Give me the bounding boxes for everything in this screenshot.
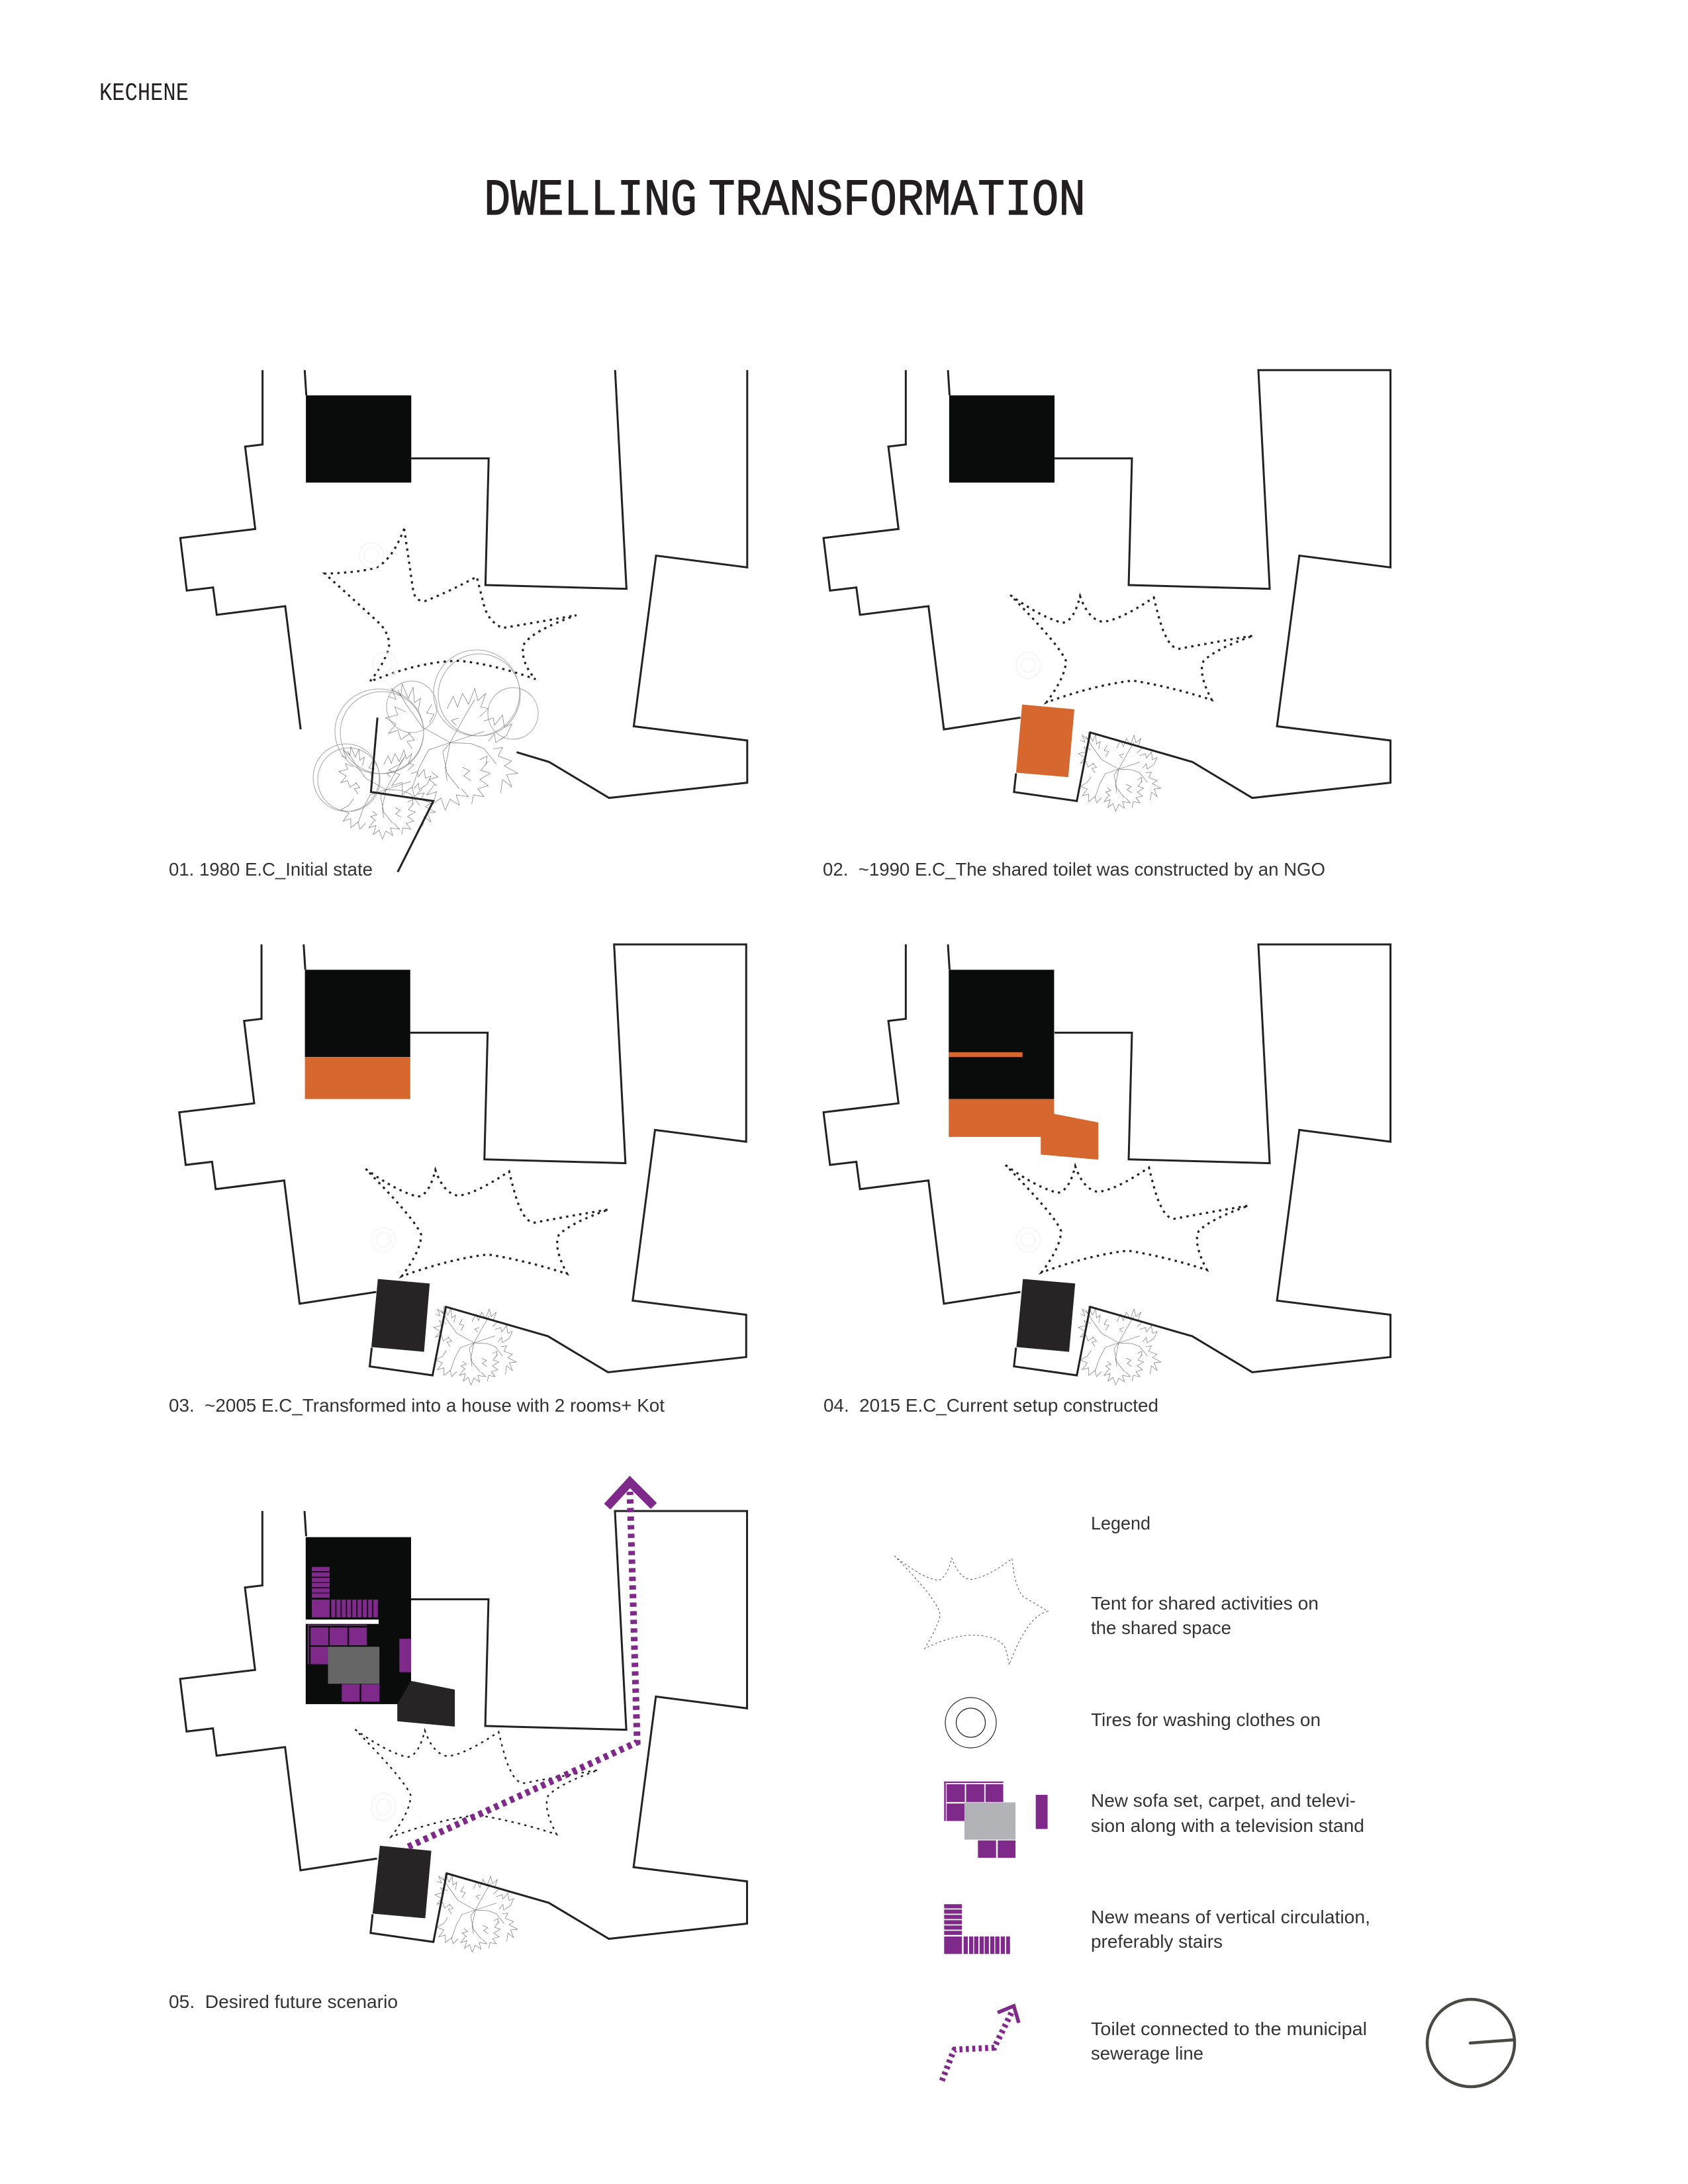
title: DWELLING <box>484 172 697 230</box>
site plan outline <box>180 370 747 872</box>
house with furniture and stairs <box>306 1537 455 1919</box>
legend icon: sewer arrow <box>942 2006 1019 2081</box>
legend heading: Legend <box>1091 1513 1150 1533</box>
legend icon: stairs <box>944 1904 1010 1954</box>
legend text: stairs: preferably stairs <box>1091 1931 1223 1952</box>
tree canopy and tree drawing <box>313 650 538 839</box>
panel 05: desired future scenario <box>180 1482 747 1952</box>
legend icon: tent <box>894 1556 1048 1665</box>
caption 03: 03. ~2005 E.C_Transformed into a house with 2 rooms+ Kot <box>169 1395 665 1416</box>
tree <box>1078 1306 1161 1385</box>
caption 05: 05. Desired future scenario <box>169 1991 398 2012</box>
tent <box>325 529 577 682</box>
caption 04: 04. 2015 E.C_Current setup constructed <box>823 1395 1158 1416</box>
existing house block <box>306 395 411 482</box>
legend text: stairs <box>1091 1907 1370 1952</box>
tent <box>1010 595 1254 702</box>
legend text: tent: Tent for shared activities on <box>1091 1593 1319 1614</box>
caption 02: 02. ~1990 E.C_The shared toilet was constructed by an NGO <box>823 859 1325 880</box>
tent <box>1006 1165 1248 1273</box>
legend text: tires: Tires for washing clothes on <box>1091 1709 1321 1730</box>
tree <box>434 1306 516 1385</box>
legend text: sofa set: New sofa set, carpet, and televi- <box>1091 1790 1356 1811</box>
tree <box>1078 733 1161 811</box>
icon: north arrow compass <box>1427 1999 1515 2087</box>
sewer line arrow <box>408 1482 654 1846</box>
house, extensions and toilet blocks <box>949 970 1098 1352</box>
legend icon: tires <box>945 1698 996 1748</box>
header label: KECHENE: KECHENE <box>99 79 189 108</box>
title <box>484 172 1086 230</box>
panel 01: initial state <box>180 370 747 872</box>
tree <box>435 1874 518 1952</box>
site plan outline <box>179 944 746 1375</box>
panel 02: shared toilet <box>823 370 1391 811</box>
title: TRANSFORMATION <box>708 172 1086 230</box>
tent <box>355 1729 598 1837</box>
legend text: sewer: Toilet connected to the municipal <box>1091 2019 1367 2039</box>
house and toilet blocks <box>949 395 1074 777</box>
site plan outline <box>823 370 1391 801</box>
legend text: tent: the shared space <box>1091 1617 1231 1638</box>
caption 01: 01. 1980 E.C_Initial state <box>169 859 373 880</box>
legend text: sewer <box>1091 2019 1367 2064</box>
legend icon: sofa set, carpet, television <box>944 1782 1048 1858</box>
legend text: tent <box>1091 1593 1319 1638</box>
legend text: stairs: New means of vertical circulation, <box>1091 1907 1370 1927</box>
tent <box>365 1169 609 1276</box>
site plan outline <box>180 1511 747 1942</box>
panel 04: current setup <box>823 944 1391 1385</box>
site plan outline <box>823 944 1391 1375</box>
house, extension and toilet blocks <box>305 970 430 1352</box>
legend text: sewer: sewerage line <box>1091 2043 1203 2064</box>
panel 03: house with 2 rooms and kot <box>179 944 746 1385</box>
legend text: sofa set <box>1091 1790 1364 1836</box>
legend text: sofa set: sion along with a television stand <box>1091 1815 1364 1836</box>
